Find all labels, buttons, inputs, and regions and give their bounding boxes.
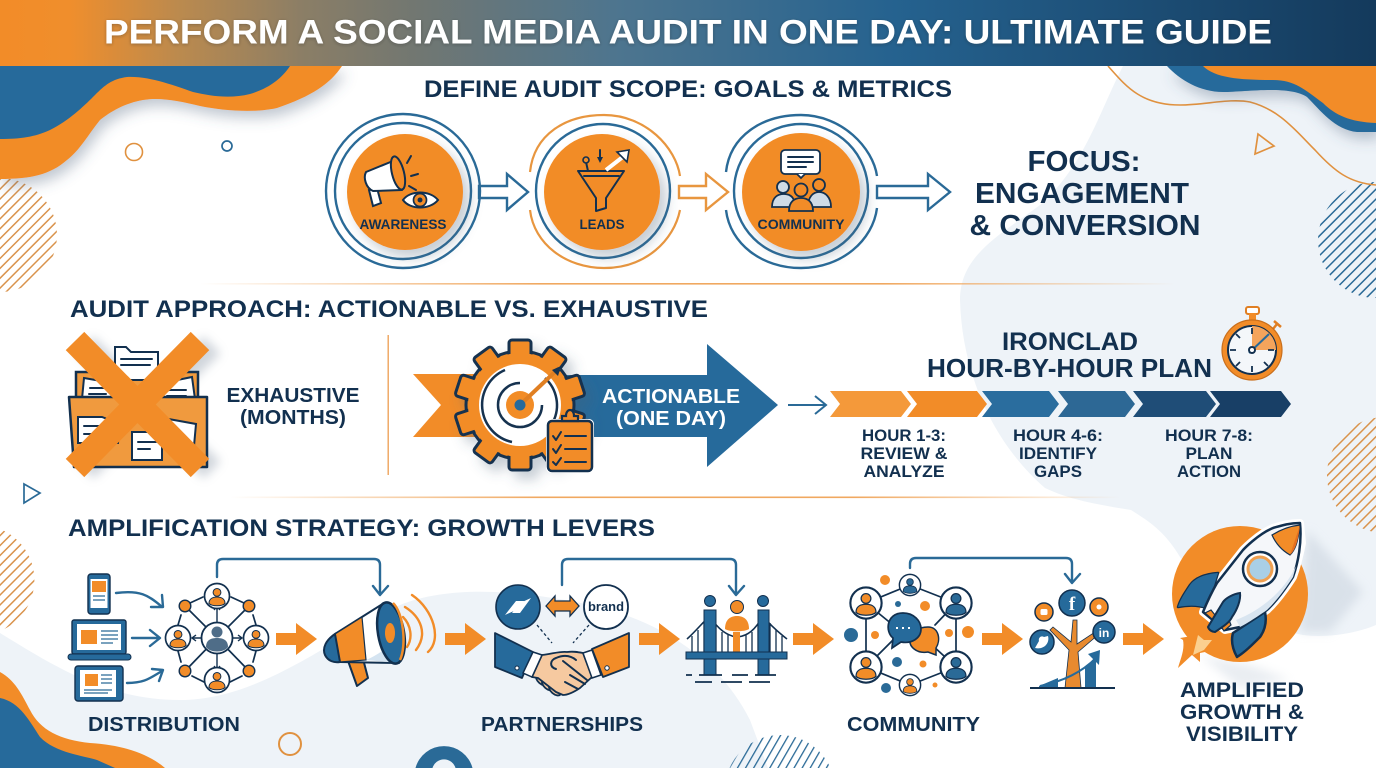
title banner: PERFORM A SOCIAL MEDIA AUDIT IN ONE DAY: ULTIMATE GUIDE — [104, 14, 1272, 52]
wave top left — [0, 66, 342, 179]
label: hour 4-6: GAPS — [1034, 463, 1082, 481]
pale blob right — [960, 66, 1376, 636]
heading: define audit scope: DEFINE AUDIT SCOPE: GOALS & METRICS — [424, 76, 952, 103]
goal: awareness: AWARENESS — [360, 217, 446, 232]
icon: phone — [88, 574, 110, 614]
label: amplified growth — [1180, 679, 1304, 746]
label: hour 7-8: HOUR 7-8: — [1165, 427, 1253, 445]
icon: crossed folder — [69, 341, 212, 470]
big arrow — [560, 344, 778, 467]
orange arrow — [793, 623, 834, 655]
orange arrow — [1123, 623, 1164, 655]
label: actionable: (ONE DAY) — [616, 408, 726, 430]
icon: growth tree: in — [1099, 626, 1109, 640]
label: hour 1-3: ANALYZE — [864, 463, 944, 481]
label: amplified growth: AMPLIFIED — [1180, 679, 1304, 702]
icon: laptop — [68, 620, 131, 660]
icon: tablet — [75, 666, 123, 701]
plan heading: IRONCLAD — [1002, 328, 1138, 356]
panel: goals circles — [326, 114, 950, 268]
goal: community — [726, 115, 877, 268]
panel: community — [844, 558, 1115, 736]
focus callout: FOCUS: — [1028, 146, 1140, 178]
icon: eye — [403, 192, 438, 208]
striped circle top left — [0, 178, 57, 292]
icon: funnel — [578, 150, 629, 211]
label: hour 7-8: PLAN — [1186, 445, 1232, 463]
arrows from devices — [116, 592, 163, 683]
wave bottom left blue — [0, 698, 115, 768]
ribbon — [413, 374, 480, 437]
orange arrow — [639, 623, 680, 655]
striped circle mid right — [1327, 418, 1376, 532]
orange arrow — [982, 623, 1023, 655]
pale wave bottom left — [0, 592, 768, 768]
label: hour 1-3: REVIEW & — [860, 445, 948, 463]
wave bottom left — [0, 672, 165, 768]
rocket fins — [1178, 573, 1266, 657]
icon: bridge — [686, 596, 787, 682]
label: hour 4-6: HOUR 4-6: — [1013, 427, 1103, 445]
plan heading — [927, 328, 1212, 383]
label: hour 1-3: HOUR 1-3: — [862, 427, 946, 445]
icon: double arrow — [546, 596, 579, 616]
label: amplified growth: GROWTH & — [1180, 701, 1304, 724]
arrow 3 — [877, 174, 950, 210]
goal: leads — [530, 115, 680, 268]
deco ring orange — [126, 144, 142, 160]
panel: partnerships — [481, 559, 787, 736]
icon: brand circle — [584, 585, 628, 629]
title banner — [0, 0, 1376, 66]
icon: stopwatch — [1222, 307, 1282, 380]
arrow 2 — [679, 174, 728, 210]
label: community: COMMUNITY — [847, 713, 980, 736]
icon: speech bubble and people — [772, 150, 831, 211]
label: hour 7-8: ACTION — [1177, 463, 1241, 481]
label: hour 4-6 — [1013, 427, 1103, 481]
panel: actionable — [413, 340, 778, 473]
label: exhaustive — [226, 385, 360, 429]
striped circle bottom — [730, 735, 830, 768]
icon: network — [166, 584, 268, 692]
label: hour 7-8 — [1165, 427, 1253, 481]
bracket arrow — [910, 558, 1080, 583]
focus callout — [970, 146, 1200, 242]
deco ring blue bottom — [416, 746, 472, 768]
panel: distribution — [68, 559, 435, 736]
panel: hour-by-hour plan — [788, 307, 1291, 481]
icon: rocket — [1172, 523, 1363, 688]
deco ring blue — [222, 141, 232, 151]
bracket arrow — [217, 559, 388, 595]
heading: amplification strategy: AMPLIFICATION STRATEGY: GROWTH LEVERS — [68, 515, 655, 542]
wave top right orange — [1203, 66, 1376, 123]
striped circle mid left — [0, 529, 34, 631]
deco triangle orange — [1255, 134, 1274, 154]
bracket arrow — [562, 559, 744, 595]
goal: community: COMMUNITY — [758, 217, 844, 232]
label: distribution: DISTRIBUTION — [88, 713, 240, 736]
wave top right — [1167, 66, 1376, 132]
label: hour 4-6: IDENTIFY — [1019, 445, 1097, 463]
label: partnerships: PARTNERSHIPS — [481, 713, 643, 736]
icon: brand circle: brand — [588, 600, 624, 614]
label: exhaustive: (MONTHS) — [240, 407, 346, 429]
focus callout: & CONVERSION — [970, 210, 1200, 242]
panel: exhaustive — [69, 341, 360, 470]
deco triangle blue — [24, 484, 40, 503]
icon: gear — [455, 340, 585, 470]
small arrow — [788, 396, 826, 414]
curve line top right — [1108, 66, 1376, 185]
icon: logo circle — [496, 585, 540, 629]
label: actionable — [602, 386, 740, 430]
arrow 1 — [479, 174, 528, 210]
timeline chevrons — [830, 391, 1291, 417]
heading: audit approach: AUDIT APPROACH: ACTIONABLE VS. EXHAUSTIVE — [70, 296, 708, 323]
icon: growth tree — [1030, 590, 1115, 688]
icon: community network — [844, 574, 974, 696]
icon: megaphone — [365, 155, 418, 206]
icon: megaphone large — [324, 595, 435, 686]
striped circle top right — [1318, 182, 1376, 298]
goal: awareness — [326, 114, 480, 268]
icon: growth tree: f — [1069, 594, 1076, 615]
orange arrow — [276, 623, 317, 655]
orange arrow — [445, 623, 486, 655]
icon: clipboard — [546, 410, 594, 473]
plan heading: HOUR-BY-HOUR PLAN — [927, 355, 1212, 383]
deco ring orange bottom — [279, 733, 301, 755]
panel: amplified growth — [1172, 523, 1363, 746]
label: hour 1-3 — [860, 427, 948, 481]
goal: leads: LEADS — [580, 217, 624, 232]
focus callout: ENGAGEMENT — [975, 178, 1189, 210]
wave top left blue — [0, 66, 290, 139]
label: amplified growth: VISIBILITY — [1186, 723, 1298, 746]
label: actionable: ACTIONABLE — [602, 386, 740, 408]
icon: handshake — [495, 633, 629, 698]
label: exhaustive: EXHAUSTIVE — [226, 385, 360, 407]
